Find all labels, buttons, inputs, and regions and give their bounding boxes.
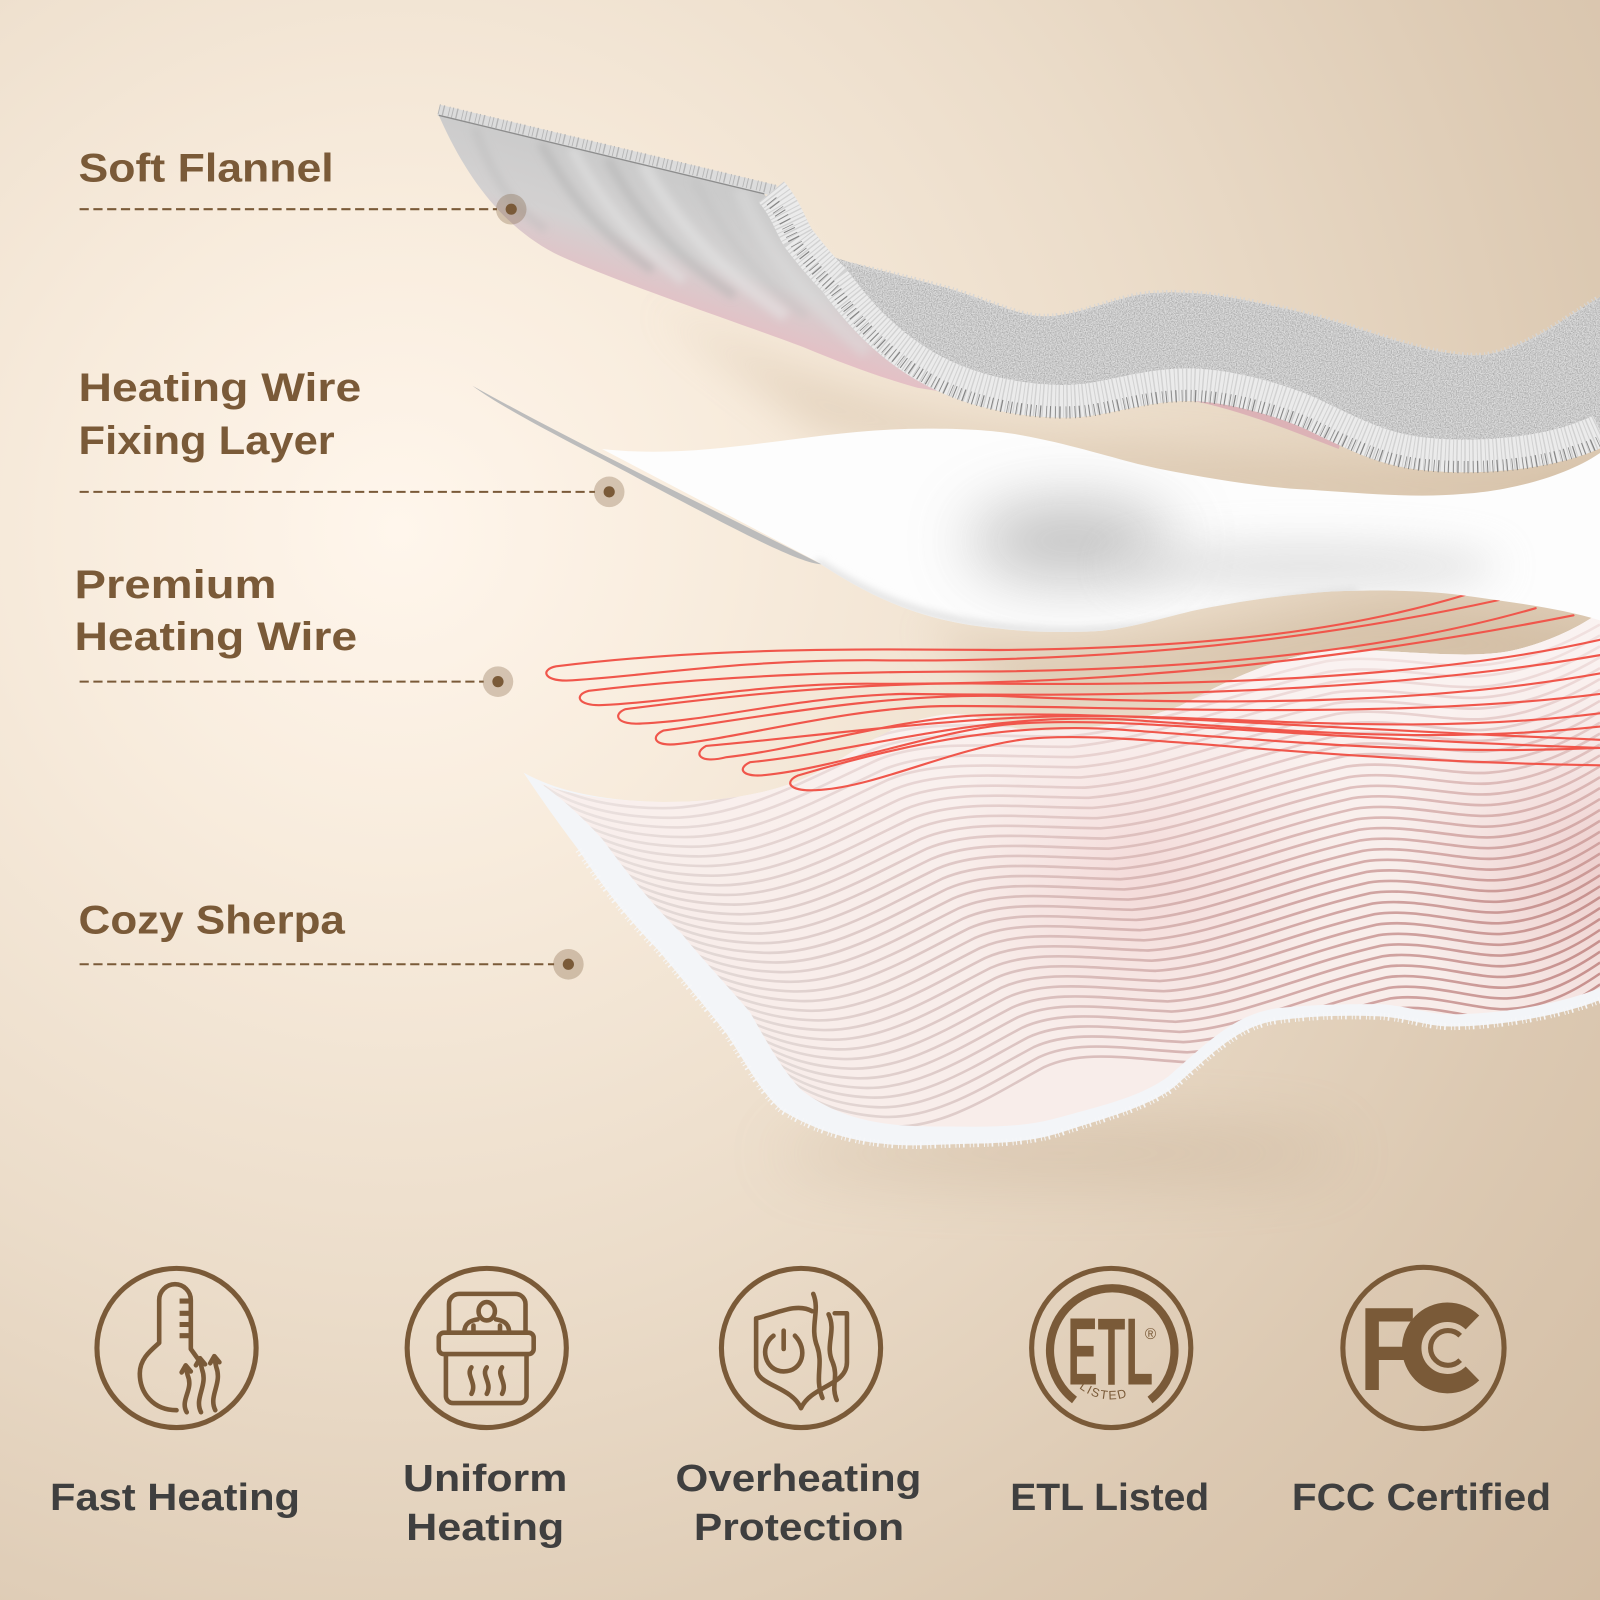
label: uniform heating: Uniform — [403, 1457, 567, 1499]
wire loop 7 — [790, 728, 1600, 790]
label: fast heating: Fast Heating — [50, 1476, 300, 1518]
wire loop 2 — [580, 608, 1573, 705]
icon: ETL listed mark — [1029, 1266, 1194, 1430]
wire loop 1 — [546, 595, 1499, 681]
label: ETL listed: ETL Listed — [1010, 1476, 1209, 1518]
label: uniform heating: Heating — [406, 1506, 564, 1548]
icon: uniform heating bed — [407, 1268, 566, 1428]
layer: premium heating wire — [546, 595, 1600, 790]
sherpa white fuzzy edge — [579, 850, 1600, 1145]
icon: ETL listed mark: ® — [1145, 1326, 1157, 1343]
flannel edge fringe — [771, 192, 1600, 467]
callout: cozy sherpa: Cozy Sherpa — [79, 899, 346, 943]
callout: soft flannel — [79, 147, 527, 224]
icon: ETL listed mark: LISTED — [1080, 1384, 1126, 1400]
label: overheating protection: Protection — [694, 1506, 904, 1548]
icon: FCC mark: F — [1359, 1284, 1416, 1416]
callout: premium heating wire: Premium — [74, 563, 277, 607]
callout: soft flannel: Soft Flannel — [79, 147, 334, 191]
layer: heating wire fixing layer — [472, 386, 1600, 632]
layer: cozy sherpa — [510, 602, 1600, 1168]
wire loop 3 — [618, 640, 1600, 724]
label: overheating protection: Overheating — [676, 1457, 921, 1499]
icon: FCC mark — [1343, 1267, 1504, 1429]
callout: cozy sherpa — [79, 899, 584, 980]
callout: heating wire fixing layer: Heating Wire — [79, 366, 361, 410]
label: overheating protection — [676, 1457, 921, 1548]
white film — [602, 429, 1600, 632]
label: FCC certified: FCC Certified — [1292, 1476, 1551, 1518]
icon: overheating protection shield — [721, 1268, 881, 1428]
icon: fast heating thermometer — [97, 1268, 256, 1428]
callout: heating wire fixing layer: Fixing Layer — [79, 419, 335, 463]
icon: ETL listed mark: ETL — [1067, 1299, 1153, 1406]
layer shadows — [653, 306, 1600, 1176]
sherpa stripes — [536, 624, 1600, 1168]
layer: soft flannel — [439, 109, 1600, 467]
flannel grey face — [816, 250, 1600, 456]
flannel pink edge wedge — [1188, 378, 1347, 449]
grey sliver edge — [472, 386, 821, 564]
callout: premium heating wire — [74, 563, 513, 697]
wire loop 5 — [699, 713, 1600, 759]
wire loop 4 — [656, 673, 1600, 744]
flannel top fringe — [439, 109, 776, 194]
label: uniform heating — [403, 1457, 567, 1548]
wire loop 6 — [743, 718, 1600, 775]
callout: premium heating wire: Heating Wire — [74, 615, 357, 659]
callout: heating wire fixing layer — [79, 366, 624, 507]
flannel underside — [439, 115, 949, 393]
